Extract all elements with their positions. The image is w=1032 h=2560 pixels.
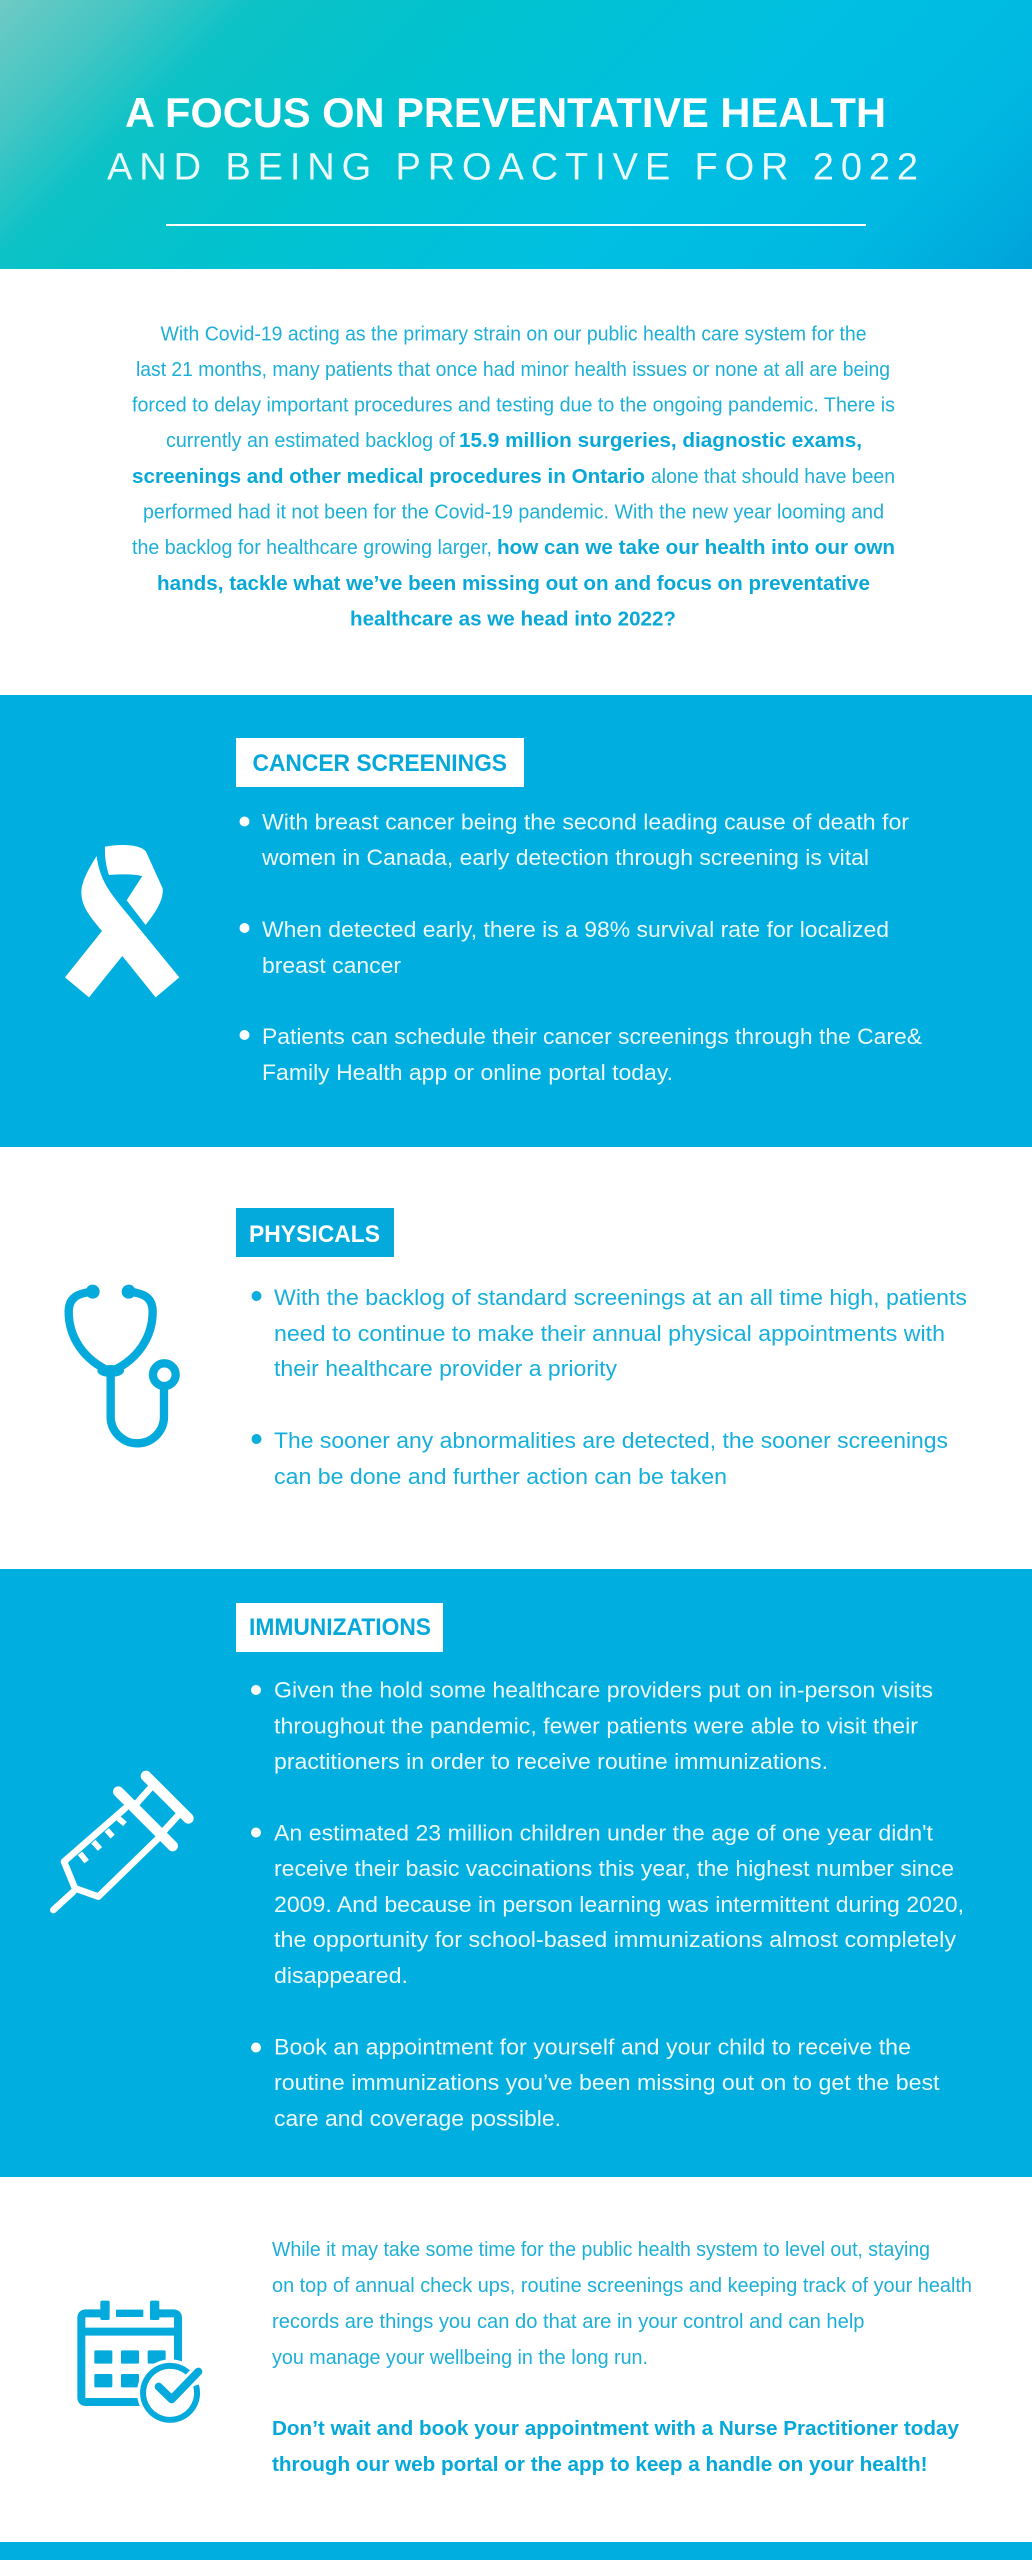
bullet list: cancer screenings: Family Health app or online portal today. [262,1060,673,1085]
panel: cancer screenings [0,695,1032,1147]
panel: introduction text: the backlog for healthcare growing larger, [132,536,492,559]
panel: introduction text: currently an estimated backlog of [166,429,455,452]
bullet list: physicals: With the backlog of standard screenings at an all time high, patients [274,1285,967,1310]
closing paragraph: you manage your wellbeing in the long run. [272,2346,648,2369]
bullet list: immunizations: care and coverage possible. [274,2106,561,2131]
heading: physicals: PHYSICALS [249,1221,380,1248]
panel: introduction text: performed had it not been for the Covid-19 pandemic. With the new year looming and [143,500,884,524]
panel: introduction text: forced to delay important procedures and testing due to the ongoing pandemic. There is [132,394,895,416]
panel: introduction text: screenings and other medical procedures in Ontario [132,465,645,488]
closing paragraph: on top of annual check ups, routine screenings and keeping track of your health [272,2274,972,2297]
heading: cancer screenings: CANCER SCREENINGS [252,750,507,777]
panel: introduction text [132,322,895,630]
panel: introduction text: hands, tackle what we’ve been missing out on and focus on preventative [157,572,870,595]
bullet list: cancer screenings: women in Canada, early detection through screening is vital [261,845,869,870]
panel: introduction text: how can we take our health into our own [497,536,895,559]
closing paragraph: records are things you can do that are in your control and can help [272,2310,864,2333]
panel: introduction text: With Covid-19 acting as the primary strain on our public health care system for the [160,322,866,346]
closing paragraph: While it may take some time for the public health system to level out, staying [272,2238,930,2261]
panel: header banner [0,0,1032,269]
icon: calendar with check mark [81,2301,204,2426]
icon: syringe [53,1776,188,1910]
bullet list: immunizations: An estimated 23 million children under the age of one year didn't [274,1820,934,1846]
panel: closing message [81,2238,972,2476]
panel: physicals [69,1208,967,1489]
panel: introduction text: last 21 months, many patients that once had minor health issues or none at all are being [136,358,890,381]
bullet list: immunizations: routine immunizations you’ve been missing out on to get the best [274,2070,940,2095]
subtitle: AND BEING PROACTIVE FOR 2022 [107,146,918,188]
bullet list: physicals: their healthcare provider a priority [274,1356,618,1381]
bullet list: cancer screenings: When detected early, there is a 98% survival rate for localized [262,917,889,942]
bullet list: cancer screenings: breast cancer [262,953,402,978]
heading: physicals [236,1208,394,1257]
heading: immunizations [236,1603,443,1652]
bullet list: physicals [252,1285,967,1489]
call to action: Don’t wait and book your appointment with a Nurse Practitioner today [272,2417,960,2440]
bullet list: immunizations: Given the hold some healthcare providers put on in-person visits [274,1678,933,1702]
heading: cancer screenings [236,738,524,787]
bullet list: immunizations: the opportunity for school-based immunizations almost completely [274,1927,957,1952]
bullet list: physicals: The sooner any abnormalities are detected, the sooner screenings [274,1428,948,1453]
bullet list: cancer screenings: Patients can schedule their cancer screenings through the Care& [262,1024,922,1049]
panel: immunizations [0,1569,1032,2177]
panel: introduction text: 15.9 million surgeries, diagnostic exams, [459,429,862,452]
bullet list: cancer screenings [240,810,922,1085]
icon: stethoscope [69,1285,176,1443]
panel: introduction text: healthcare as we head into 2022? [350,608,676,630]
closing paragraph [272,2238,972,2369]
bullet list: cancer screenings: With breast cancer being the second leading cause of death for [262,810,910,834]
bullet list: immunizations [251,1678,964,2131]
bullet list: physicals: can be done and further action can be taken [274,1464,727,1489]
bullet list: immunizations: receive their basic vaccinations this year, the highest number since [274,1856,954,1881]
panel: introduction text: alone that should have been [651,465,895,488]
icon: awareness ribbon [65,845,179,997]
call to action: through our web portal or the app to keep a handle on your health! [272,2453,928,2476]
bullet list: immunizations: 2009. And because in person learning was intermittent during 2020, [274,1892,964,1917]
bullet list: immunizations: practitioners in order to receive routine immunizations. [274,1749,828,1774]
bullet list: immunizations: disappeared. [274,1963,408,1988]
call to action [272,2417,960,2476]
bullet list: immunizations: throughout the pandemic, fewer patients were able to visit their [274,1714,919,1738]
title: A FOCUS ON PREVENTATIVE HEALTH [125,89,886,136]
bullet list: physicals: need to continue to make their annual physical appointments with [274,1321,945,1346]
heading: immunizations: IMMUNIZATIONS [249,1614,431,1641]
bullet list: immunizations: Book an appointment for yourself and your child to receive the [274,2034,911,2060]
footer band [0,2542,1032,2560]
